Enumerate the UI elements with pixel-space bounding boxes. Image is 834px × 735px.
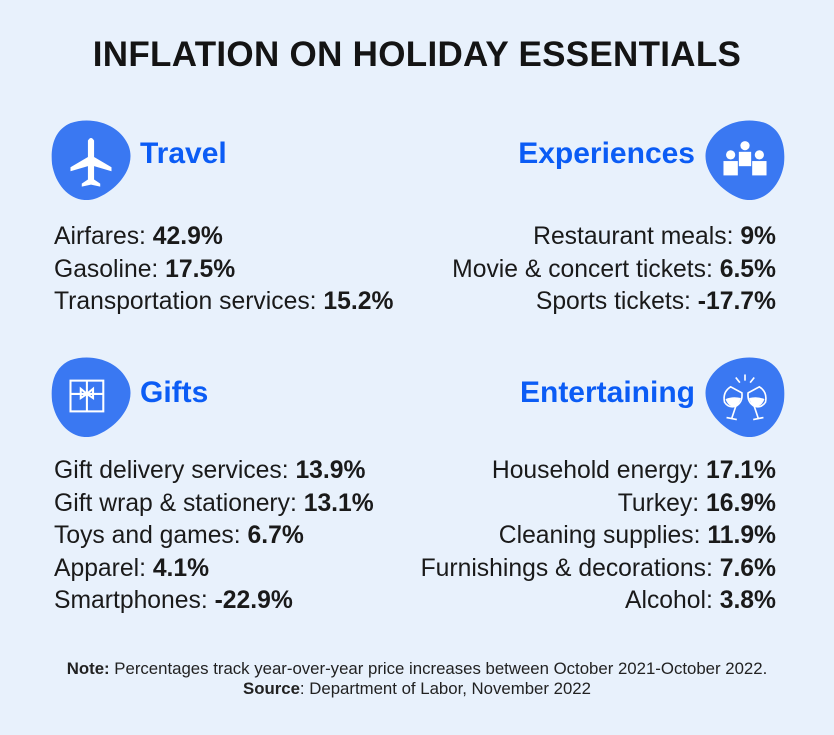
list: travel: Gasoline: 17.5% xyxy=(54,256,235,283)
heading: Experiences: Experiences xyxy=(518,137,695,170)
list: experiences: Sports tickets: -17.7% xyxy=(536,288,776,315)
list: gifts: Gift delivery services: 13.9% xyxy=(54,457,365,484)
list: experiences: Movie & concert tickets: 6.5% xyxy=(452,256,776,283)
note and source xyxy=(67,659,767,698)
icon: wine glasses xyxy=(706,358,784,437)
list: travel xyxy=(54,223,393,315)
list: entertaining xyxy=(421,457,776,614)
panel: entertaining xyxy=(421,358,784,614)
list: gifts: Apparel: 4.1% xyxy=(54,555,209,582)
icon: people xyxy=(706,120,784,200)
list: gifts: Smartphones: -22.9% xyxy=(54,587,293,614)
heading: Gifts: Gifts xyxy=(140,376,208,409)
list: entertaining: Cleaning supplies: 11.9% xyxy=(499,522,776,549)
icon: airplane xyxy=(52,120,130,200)
note and source: Note: Percentages track year-over-year price increases between October 2021-October 2022. xyxy=(67,659,767,678)
heading: Entertaining: Entertaining xyxy=(520,376,695,409)
title: INFLATION ON HOLIDAY ESSENTIALS xyxy=(93,35,741,74)
list: entertaining: Alcohol: 3.8% xyxy=(625,587,776,614)
list: travel: Airfares: 42.9% xyxy=(54,223,223,250)
list: gifts: Gift wrap & stationery: 13.1% xyxy=(54,490,374,517)
icon: gift xyxy=(52,358,130,437)
note and source: Source: Department of Labor, November 2022 xyxy=(243,679,591,698)
heading: Travel: Travel xyxy=(140,137,227,170)
list: travel: Transportation services: 15.2% xyxy=(54,288,393,315)
list: entertaining: Household energy: 17.1% xyxy=(492,457,776,484)
list: experiences: Restaurant meals: 9% xyxy=(533,223,776,250)
list: entertaining: Furnishings & decorations: 7.6% xyxy=(421,555,776,582)
list: experiences xyxy=(452,223,776,315)
list: entertaining: Turkey: 16.9% xyxy=(618,490,776,517)
panel: gifts xyxy=(52,358,374,614)
panel: travel xyxy=(52,120,393,315)
panel: experiences xyxy=(452,120,784,315)
list: gifts xyxy=(54,457,374,614)
list: gifts: Toys and games: 6.7% xyxy=(54,522,304,549)
